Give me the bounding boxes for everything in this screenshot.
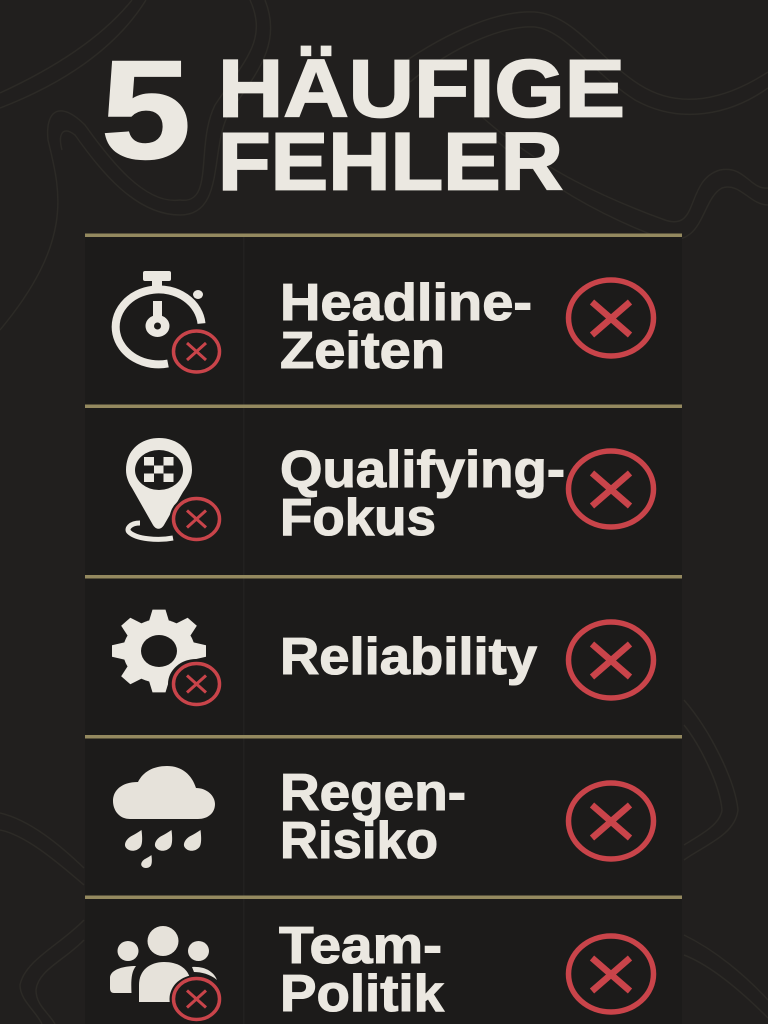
icon: team of people with small x badge <box>110 926 222 1023</box>
panel: error list <box>85 234 682 1024</box>
label: Headline-Zeiten: Zeiten <box>280 322 445 380</box>
title number 5: 5 <box>101 31 191 188</box>
label: Headline-Zeiten <box>280 274 532 380</box>
row 2: Qualifying-Fokus <box>85 404 682 547</box>
icon: red x in circle <box>568 622 654 698</box>
icon: rain cloud <box>113 766 215 868</box>
row 1: Headline-Zeiten <box>85 234 682 380</box>
title line: HÄUFIGE: HÄUFIGE <box>218 44 625 134</box>
title <box>101 31 625 208</box>
label: Reliability: Reliability <box>280 628 537 686</box>
icon: red x in circle <box>568 451 654 527</box>
icon: stopwatch with small x badge <box>116 271 220 372</box>
label: Headline-Zeiten: Headline- <box>280 274 532 332</box>
label: Qualifying-Fokus: Qualifying- <box>280 441 565 499</box>
label: Qualifying-Fokus: Fokus <box>280 489 436 547</box>
icon: gear with small x badge <box>112 610 224 709</box>
icon: red x in circle <box>568 936 654 1012</box>
label: Qualifying-Fokus <box>280 441 565 547</box>
row 3: Reliability <box>85 575 682 709</box>
title line: FEHLER: FEHLER <box>218 116 563 208</box>
label: Regen-Risiko: Risiko <box>280 812 438 870</box>
label: Team-Politik: Politik <box>280 965 444 1023</box>
label: Regen-Risiko <box>280 764 466 870</box>
label: Team-Politik <box>279 917 444 1023</box>
icon: red x in circle <box>568 280 654 356</box>
label: Regen-Risiko: Regen- <box>280 764 466 822</box>
label: Team-Politik: Team- <box>279 917 442 975</box>
row 4: Regen-Risiko <box>85 735 682 870</box>
icon: map pin with checkered flag and small x badge <box>126 438 222 543</box>
icon: red x in circle <box>568 783 654 859</box>
row 5: Team-Politik <box>85 896 682 1023</box>
